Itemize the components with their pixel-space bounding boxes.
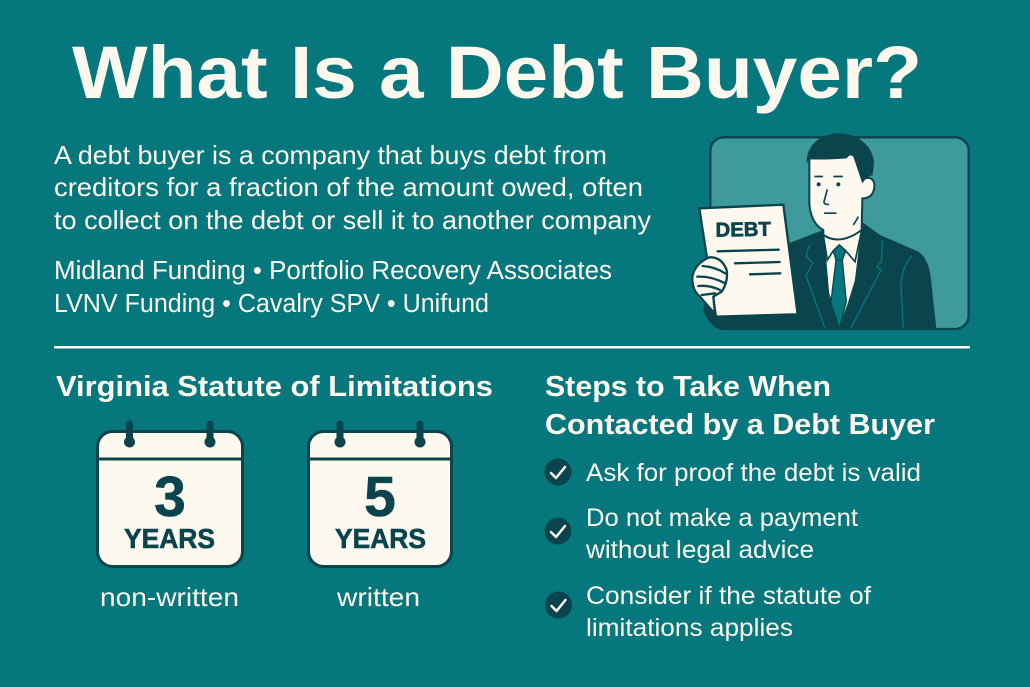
shirt [823, 230, 862, 327]
document label: DEBT [715, 219, 771, 242]
calendar: 3 years non-written: 3 [154, 465, 186, 529]
definition text block [54, 140, 651, 235]
head [809, 153, 874, 239]
heading: steps to take: Steps to Take When [545, 371, 831, 403]
definition text block: creditors for a fraction of the amount owed, often [54, 172, 643, 202]
step 3 [545, 582, 871, 642]
debt buyer company names [54, 257, 612, 318]
definition text block: to collect on the debt or sell it to another company [54, 205, 651, 235]
step 2: without legal advice [585, 536, 814, 564]
label: non-written: non-written [100, 582, 239, 612]
step 3: limitations applies [586, 614, 793, 642]
calendar: 3 years non-written: YEARS [124, 523, 215, 554]
illustration: man holding debt document [692, 133, 969, 329]
hand [692, 257, 727, 314]
heading: steps to take [545, 371, 935, 441]
document [699, 205, 798, 317]
step 2 [544, 504, 858, 564]
document lines [718, 250, 780, 274]
debt buyer company names: Midland Funding • Portfolio Recovery Associates [54, 257, 612, 285]
step 1: Ask for proof the debt is valid [586, 459, 921, 487]
calendar: 5 years written: YEARS [335, 523, 426, 554]
suit jacket [703, 222, 936, 329]
face features [814, 176, 843, 214]
divider [54, 346, 970, 348]
tie [831, 245, 846, 328]
lapels [806, 230, 882, 328]
title: What Is a Debt Buyer? [72, 31, 922, 114]
hair [807, 133, 874, 183]
heading: steps to take: Contacted by a Debt Buyer [545, 409, 935, 441]
step 2: Do not make a payment [586, 504, 858, 532]
debt buyer company names: LVNV Funding • Cavalry SPV • Unifund [54, 290, 489, 318]
definition text block: A debt buyer is a company that buys debt from [54, 140, 607, 170]
calendar: 3 years non-written [97, 424, 243, 566]
heading: Virginia statute of limitations: Virginia Statute of Limitations [56, 371, 493, 403]
step 3: Consider if the statute of [586, 582, 871, 610]
calendar: 5 years written: 5 [364, 465, 396, 529]
calendar: 5 years written [308, 424, 452, 566]
label: written: written [336, 582, 420, 612]
shirt collar [823, 230, 862, 262]
